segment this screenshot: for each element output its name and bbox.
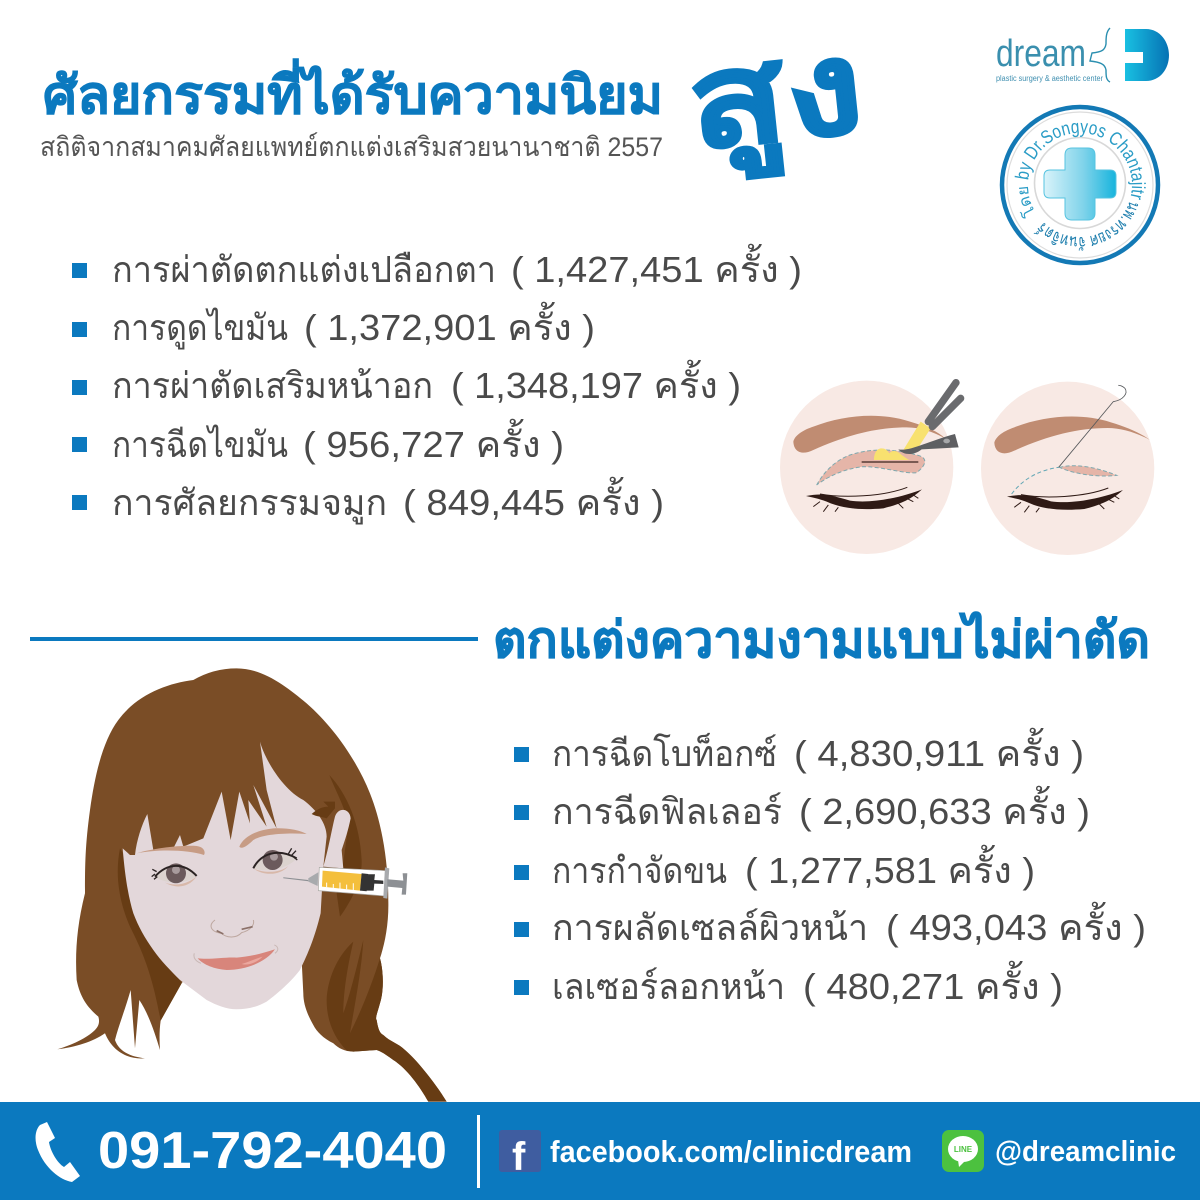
nose xyxy=(211,920,254,937)
bullet item 1: ( 1,427,451 ครั้ง ) xyxy=(511,243,802,290)
title: ศัลยกรรมที่ได้รับความนิยม xyxy=(43,59,663,125)
lips xyxy=(194,945,278,970)
logo: dream clinic: dream xyxy=(996,33,1086,75)
bullet item 2: การดูดไขมัน xyxy=(112,307,288,350)
bullet item 1 xyxy=(72,243,802,290)
line handle: @dreamclinic xyxy=(995,1136,1176,1168)
bullet item 3: การกำจัดขน xyxy=(552,850,727,891)
illustration: woman with syringe xyxy=(57,668,447,1102)
bullet item 5: การศัลยกรรมจมูก xyxy=(112,482,387,525)
bullet item 4: ( 493,043 ครั้ง ) xyxy=(886,901,1146,948)
bullet item 3: การผ่าตัดเสริมหน้าอก xyxy=(112,365,433,406)
footer contact bar xyxy=(0,1102,1200,1200)
hair shadow right top xyxy=(329,775,362,917)
bullet item 1: ( 4,830,911 ครั้ง ) xyxy=(794,727,1084,774)
syringe xyxy=(283,867,407,899)
bullet item 5: ( 480,271 ครั้ง ) xyxy=(803,960,1063,1007)
subtitle: สถิติจากสมาคมศัลยแพทย์ตกแต่งเสริมสวยนานาชาติ 2557 xyxy=(40,131,663,162)
logo: dream clinic: plastic surgery & aesthetic center xyxy=(996,74,1103,83)
ear xyxy=(323,810,351,868)
bullet item 3 xyxy=(72,359,741,406)
bullet item 5 xyxy=(514,960,1063,1007)
bullet item 2: ( 2,690,633 ครั้ง ) xyxy=(799,785,1090,832)
title xyxy=(40,13,871,186)
bullet item 5: ( 849,445 ครั้ง ) xyxy=(403,476,664,523)
bullet item 3 xyxy=(514,844,1035,891)
stamp badge: โดย xyxy=(1019,186,1034,218)
section heading xyxy=(30,611,1150,668)
bullet item 2 xyxy=(514,785,1090,832)
bullet item 1 xyxy=(514,727,1084,774)
hair tuft near ear xyxy=(312,802,335,818)
bullet item 5 xyxy=(72,476,664,525)
bullet item 2: ( 1,372,901 ครั้ง ) xyxy=(304,301,595,348)
bullet item 3: ( 1,348,197 ครั้ง ) xyxy=(451,359,741,406)
bullet item 2: การฉีดฟิลเลอร์ xyxy=(552,791,782,832)
bullet item 4: การผลัดเซลล์ผิวหน้า xyxy=(552,907,868,948)
bullet item 3: ( 1,277,581 ครั้ง ) xyxy=(745,844,1035,891)
bullet item 5: เลเซอร์ลอกหน้า xyxy=(552,966,785,1007)
icon: facebook xyxy=(499,1130,541,1179)
icon: line xyxy=(942,1130,984,1172)
eye circle: left xyxy=(780,381,961,554)
facebook address: facebook.com/clinicdream xyxy=(550,1134,912,1169)
icon: phone xyxy=(36,1122,80,1182)
right eye xyxy=(253,848,297,874)
bullet item 1: การผ่าตัดตกแต่งเปลือกตา xyxy=(112,249,496,290)
stamp ring text: by Dr.Songyos Chantajitr xyxy=(1014,122,1146,200)
icon: line: LINE xyxy=(954,1145,973,1154)
icon: facebook: f xyxy=(512,1135,526,1179)
list: non-surgical procedures xyxy=(514,727,1146,1007)
eye circle: right xyxy=(981,382,1154,555)
bullet item 4 xyxy=(514,901,1146,948)
logo: dream clinic xyxy=(996,28,1169,83)
section heading: ตกแต่งความงามแบบไม่ผ่าตัด xyxy=(493,611,1150,668)
bullet item 1: การฉีดโบท็อกซ์ xyxy=(552,731,777,774)
phone number: 091-792-4040 xyxy=(98,1122,447,1180)
illustration: eyelid surgery xyxy=(780,381,1154,555)
hair shadow right bottom xyxy=(327,940,447,1102)
title emphasis word: สูง xyxy=(681,13,871,186)
stamp badge xyxy=(1000,104,1160,266)
eyebrows xyxy=(137,828,307,855)
bullet item 2 xyxy=(72,301,595,350)
bullet item 4: ( 956,727 ครั้ง ) xyxy=(303,418,564,465)
left eye xyxy=(152,863,197,886)
hair back xyxy=(57,668,447,1102)
bullet item 4 xyxy=(72,418,564,465)
list: surgical procedures xyxy=(72,243,802,525)
stamp badge: นพ.ทรงยศ จันทจิตร์ xyxy=(1034,202,1138,251)
face xyxy=(123,742,327,1009)
bullet item 4: การฉีดไขมัน xyxy=(112,424,288,465)
icon: medical cross xyxy=(1044,148,1116,220)
hair shadow left xyxy=(118,848,182,1021)
